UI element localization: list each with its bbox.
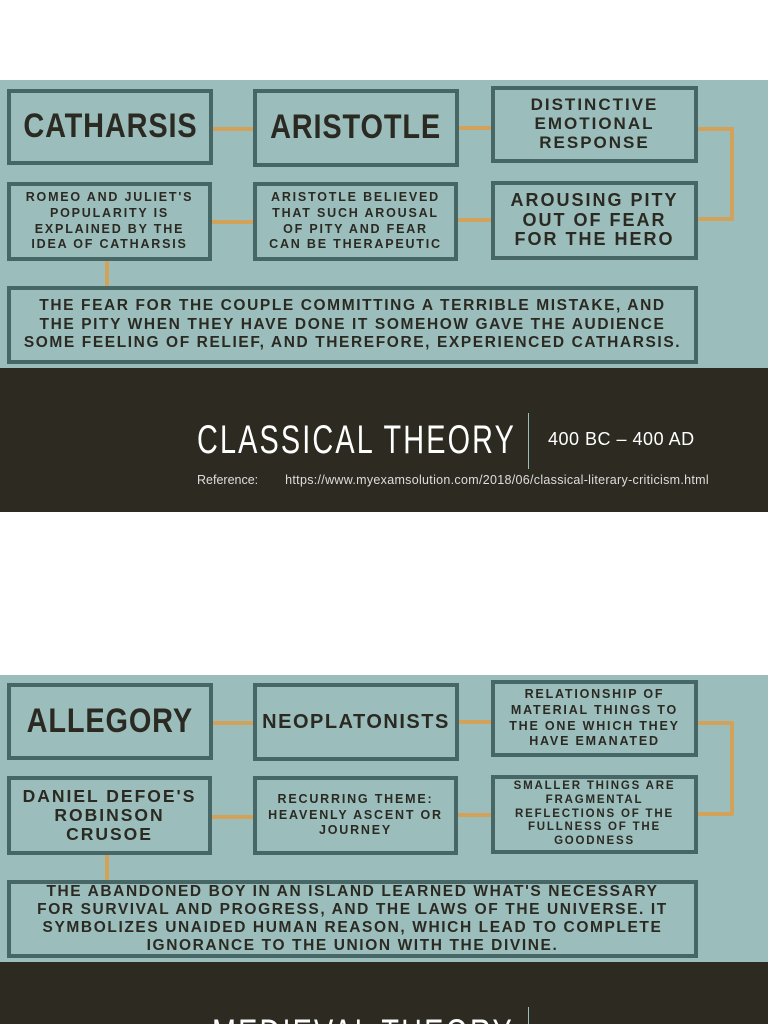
box: smaller things: FULLNESS OF THE [528, 821, 661, 833]
band: classical theory [0, 368, 768, 512]
box: recurring theme: HEAVENLY ASCENT OR [268, 808, 443, 822]
box: daniel defoe: CRUSOE [66, 824, 153, 844]
box: distinctive emotional response: RESPONSE [539, 133, 650, 152]
box: relationship: RELATIONSHIP OF [525, 687, 664, 701]
box: summary: THE FEAR FOR THE COUPLE COMMITTING A TERRIBLE MISTAKE, AND [39, 297, 666, 314]
box: arousing pity: OUT OF FEAR [522, 210, 666, 230]
connectors [105, 720, 734, 880]
box: romeo and juliet: ROMEO AND JULIET'S [26, 190, 193, 204]
box: romeo and juliet [7, 182, 212, 261]
box: aristotle [253, 89, 459, 167]
box: distinctive emotional response [491, 86, 698, 163]
box: daniel defoe: ROBINSON [54, 805, 165, 825]
box: romeo and juliet: IDEA OF CATHARSIS [31, 237, 188, 251]
box: recurring theme [253, 776, 458, 855]
box: daniel defoe: DANIEL DEFOE'S [23, 786, 196, 806]
box: romeo and juliet: POPULARITY IS [50, 206, 169, 220]
box: summary: SOME FEELING OF RELIEF, AND THEREFORE, EXPERIENCED CATHARSIS. [24, 334, 681, 351]
box: smaller things: REFLECTIONS OF THE [515, 808, 674, 820]
box: aristotle believed: CAN BE THERAPEUTIC [269, 237, 442, 251]
box: distinctive emotional response: DISTINCTIVE [531, 95, 658, 114]
box: summary: IGNORANCE TO THE UNION WITH THE DIVINE. [147, 937, 558, 954]
box: allegory: ALLEGORY [27, 702, 193, 740]
box: recurring theme: JOURNEY [319, 823, 392, 837]
box: smaller things: FRAGMENTAL [546, 794, 643, 806]
box: catharsis [7, 89, 213, 165]
text: reference: Reference: https://www.myexamsolution.com/2018/06/classical-literary-criticism.html [197, 473, 709, 487]
box: aristotle believed: OF PITY AND FEAR [283, 222, 428, 236]
box: smaller things: SMALLER THINGS ARE [514, 780, 675, 792]
box: romeo and juliet: EXPLAINED BY THE [35, 222, 184, 236]
box: smaller things [491, 775, 698, 854]
box: catharsis: CATHARSIS [23, 107, 197, 145]
box: aristotle believed: ARISTOTLE BELIEVED [271, 190, 440, 204]
panel: classical flowchart [0, 80, 768, 368]
box: neoplatonists: NEOPLATONISTS [262, 711, 450, 733]
box: allegory [7, 683, 213, 760]
connectors [105, 126, 734, 286]
box: arousing pity: AROUSING PITY [510, 190, 678, 210]
text: date range: 400 BC – 400 AD [548, 429, 695, 449]
box: daniel defoe [7, 776, 212, 855]
band: medieval theory [0, 962, 768, 1024]
box: summary: THE ABANDONED BOY IN AN ISLAND LEARNED WHAT'S NECESSARY [46, 883, 659, 900]
box: summary [7, 286, 698, 364]
box: aristotle: ARISTOTLE [271, 108, 441, 146]
box: aristotle believed: THAT SUCH AROUSAL [272, 206, 439, 220]
box: distinctive emotional response: EMOTIONAL [534, 114, 654, 133]
box: relationship: MATERIAL THINGS TO [511, 703, 678, 717]
box: neoplatonists [253, 683, 459, 761]
box: summary: FOR SURVIVAL AND PROGRESS, AND THE LAWS OF THE UNIVERSE. IT [37, 901, 668, 918]
box: smaller things: GOODNESS [554, 835, 635, 847]
box: relationship: HAVE EMANATED [529, 734, 660, 748]
box: recurring theme: RECURRING THEME: [278, 792, 433, 806]
box: summary: SYMBOLIZES UNAIDED HUMAN REASON, WHICH LEAD TO COMPLETE [43, 919, 662, 936]
box: aristotle believed [253, 182, 458, 261]
panel: medieval flowchart [0, 675, 768, 962]
box: summary [7, 880, 698, 958]
box: relationship: THE ONE WHICH THEY [509, 718, 680, 732]
heading: classical theory: CLASSICAL THEORY [197, 418, 516, 462]
box: arousing pity: FOR THE HERO [514, 229, 674, 249]
box: relationship [491, 680, 698, 757]
box: summary: THE PITY WHEN THEY HAVE DONE IT SOMEHOW GAVE THE AUDIENCE [40, 316, 666, 333]
box: arousing pity [491, 181, 698, 260]
